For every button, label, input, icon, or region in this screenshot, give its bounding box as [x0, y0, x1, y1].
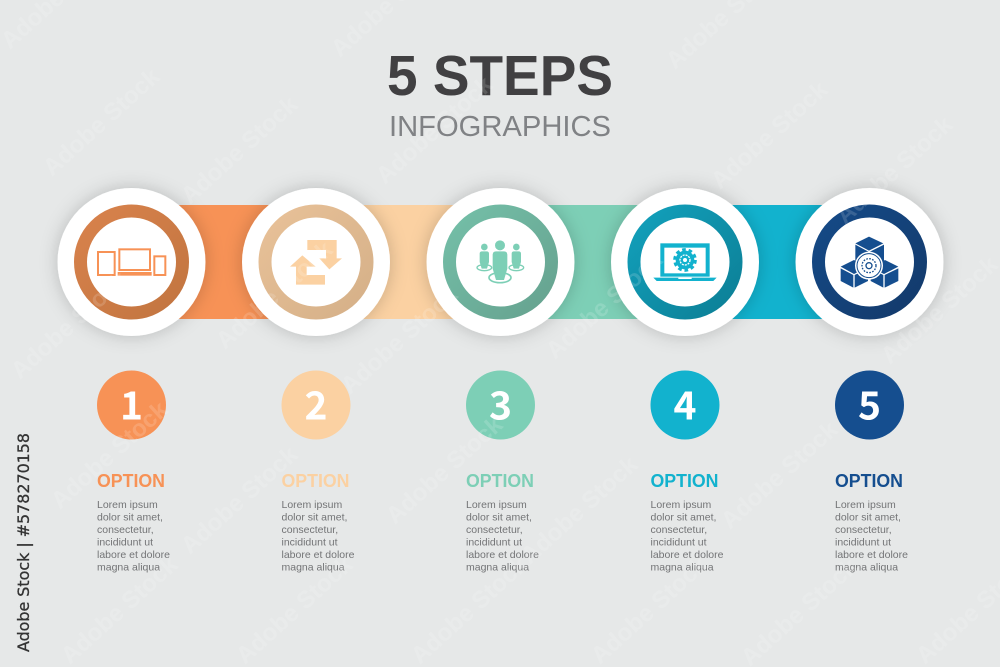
step 2 medallion	[242, 188, 390, 336]
body 2: labore et dolore	[282, 549, 355, 561]
watermark: Adobe Stock	[176, 91, 304, 209]
watermark: Adobe Stock	[876, 251, 1000, 369]
body 1: incididunt ut	[97, 536, 153, 548]
heading 5: OPTION	[835, 471, 903, 491]
subtitle: INFOGRAPHICS	[389, 111, 611, 143]
body 2: Lorem ipsum	[282, 499, 342, 511]
step 4 medallion	[611, 188, 759, 336]
watermark: Adobe Stock	[231, 551, 359, 667]
body 4: labore et dolore	[650, 549, 724, 561]
body 2: dolor sit amet,	[282, 512, 347, 524]
column 4	[650, 370, 724, 574]
body 1: consectetur,	[97, 524, 154, 536]
icon: cubes with gear	[841, 237, 898, 288]
watermark: Adobe Stock	[706, 76, 834, 194]
watermark: Adobe Stock	[371, 71, 499, 189]
body 5: magna aliqua	[835, 562, 898, 574]
body 4: magna aliqua	[650, 562, 714, 574]
number badge 5	[835, 370, 904, 440]
icon: devices	[98, 249, 165, 275]
step 3 medallion	[426, 188, 574, 336]
watermark: Adobe Stock	[586, 551, 714, 667]
heading 1: OPTION	[97, 471, 165, 491]
watermark: Adobe Stock	[516, 451, 644, 569]
band: connecting ribbon	[131, 205, 870, 319]
step 1 medallion	[58, 188, 206, 336]
watermark: Adobe Stock	[541, 246, 669, 364]
number badge 3: 3	[489, 376, 512, 432]
body 3: incididunt ut	[466, 536, 522, 548]
body 5: Lorem ipsum	[835, 499, 896, 511]
number badge 5: 5	[858, 376, 881, 432]
number badge 1	[97, 370, 166, 440]
watermark: Adobe Stock	[211, 236, 339, 354]
column 2	[282, 370, 355, 574]
body 3: Lorem ipsum	[466, 499, 527, 511]
number badge 3	[466, 370, 535, 440]
body 4: incididunt ut	[650, 536, 707, 548]
body 3: labore et dolore	[466, 549, 539, 561]
body 1: magna aliqua	[97, 562, 160, 574]
watermark: Adobe Stock	[406, 551, 534, 667]
heading 2: OPTION	[282, 471, 350, 491]
watermark: Adobe Stock	[46, 396, 174, 514]
watermark: Adobe Stock	[831, 111, 959, 229]
number badge 2: 2	[304, 376, 328, 432]
watermark: Adobe Stock	[38, 63, 166, 181]
watermark: Adobe Stock	[381, 411, 509, 529]
title: 5 STEPS	[387, 44, 613, 108]
body 4: Lorem ipsum	[650, 499, 711, 511]
step 5 medallion	[796, 188, 944, 336]
number badge 4	[650, 370, 720, 440]
stock id side label: Adobe Stock | #578270158	[14, 433, 33, 652]
body 1: dolor sit amet,	[97, 512, 163, 524]
body 2: magna aliqua	[282, 562, 345, 574]
heading 3: OPTION	[466, 471, 534, 491]
body 3: magna aliqua	[466, 562, 529, 574]
column 3	[466, 370, 539, 574]
body 4: dolor sit amet,	[650, 512, 716, 524]
body 5: labore et dolore	[835, 549, 908, 561]
watermark: Adobe Stock	[336, 281, 464, 399]
body 5: incididunt ut	[835, 536, 891, 548]
number badge 2	[282, 370, 350, 440]
watermark: Adobe Stock	[6, 266, 134, 384]
watermark: Adobe Stock	[176, 441, 304, 559]
body 5: dolor sit amet,	[835, 512, 901, 524]
watermark: Adobe Stock	[56, 551, 184, 667]
column 5	[835, 370, 908, 574]
icon: swap arrows	[290, 240, 342, 285]
icon: laptop with gear	[653, 243, 717, 281]
body 2: consectetur,	[282, 524, 338, 536]
column 1	[97, 370, 170, 574]
body 1: labore et dolore	[97, 549, 170, 561]
body 1: Lorem ipsum	[97, 499, 158, 511]
body 5: consectetur,	[835, 524, 892, 536]
body 4: consectetur,	[650, 524, 707, 536]
number badge 1: 1	[120, 376, 143, 432]
body 2: incididunt ut	[282, 536, 338, 548]
watermark: Adobe Stock	[716, 416, 844, 534]
icon: people	[477, 240, 524, 283]
heading 4: OPTION	[650, 471, 718, 491]
body 3: dolor sit amet,	[466, 512, 532, 524]
number badge 4: 4	[673, 376, 697, 432]
body 3: consectetur,	[466, 524, 523, 536]
